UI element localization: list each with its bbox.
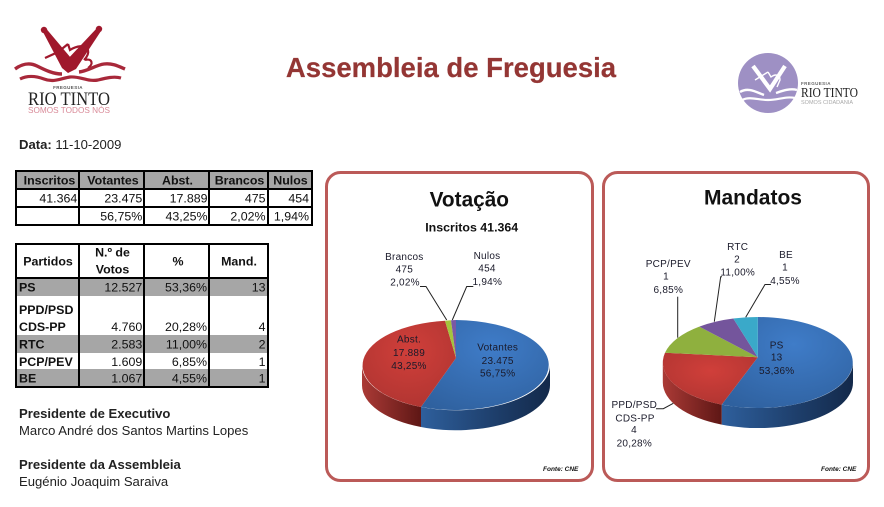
label: RTC: RTC <box>727 242 748 253</box>
table: votes by party: Mand. <box>221 255 257 269</box>
text: assembly president: Eugénio Joaquim Saraiva <box>19 474 169 489</box>
table: votes by party: 1.609 <box>111 355 142 369</box>
panel: Mandatos <box>604 172 868 480</box>
table: turnout: 23.475 <box>104 191 142 205</box>
subheading: registered voters: Inscritos 41.364 <box>425 221 518 235</box>
logo: Freguesia Rio Tinto, red <box>15 26 125 115</box>
label: Brancos: Brancos <box>385 252 424 263</box>
table: votes by party: PCP/PEV <box>19 355 73 369</box>
table: votes by party: Partidos <box>23 255 73 269</box>
leader line: BE <box>746 284 771 317</box>
label: Abst.: Abst. <box>397 335 421 346</box>
logo: Freguesia Rio Tinto, red: FREGUESIA <box>53 85 83 90</box>
label: PCP/PEV: 1 <box>663 272 669 283</box>
table: votes by party: 4,55% <box>172 371 207 385</box>
label: PS: 53,36% <box>759 366 794 377</box>
table: votes by party: 2 <box>259 337 266 351</box>
label: Votantes: Votantes <box>477 343 518 354</box>
election date: Data: 11-10-2009 <box>19 137 121 152</box>
table: turnout: Abst. <box>162 173 193 187</box>
heading: Mandatos: Mandatos <box>704 186 802 209</box>
table: votes by party: Votos <box>96 262 129 276</box>
logo: Freguesia Rio Tinto, red: RIO TINTO <box>28 89 110 110</box>
table: turnout: 2,02% <box>230 210 266 224</box>
label: Brancos: 475 <box>396 264 413 275</box>
table: votes by party: 1.067 <box>111 371 142 385</box>
heading: Votação: Votação <box>430 189 509 212</box>
label: PCP/PEV: PCP/PEV <box>646 259 691 270</box>
label: RTC: 11,00% <box>720 268 755 279</box>
label: PPD/PSD CDS-PP: CDS-PP <box>615 414 655 425</box>
source note: Fonte: CNE <box>821 466 857 473</box>
label: PPD/PSD CDS-PP: 4 <box>631 425 637 436</box>
table: votes by party: 2.583 <box>111 337 142 351</box>
label: PPD/PSD CDS-PP: PPD/PSD <box>611 400 657 411</box>
table: turnout: 1,94% <box>274 210 309 224</box>
label: Abst.: 43,25% <box>391 361 427 372</box>
table: turnout: 17.889 <box>170 191 208 205</box>
table: votes by party: 11,00% <box>166 337 207 351</box>
table: votes by party: PS <box>19 281 36 295</box>
label: PS: 13 <box>771 353 783 364</box>
label: Nulos: 1,94% <box>472 277 502 288</box>
table: votes by party: RTC <box>19 337 45 351</box>
logo: Freguesia Rio Tinto, purple: RIO TINTO <box>801 86 858 101</box>
label: RTC: 2 <box>734 254 740 265</box>
table: votes by party: 1 <box>259 355 266 369</box>
table: votes by party: 6,85% <box>172 355 207 369</box>
table: votes by party: CDS-PP <box>19 320 66 334</box>
label: Nulos: Nulos <box>474 251 500 262</box>
table: votes by party: 1 <box>259 371 266 385</box>
leader line: Brancos <box>420 286 447 320</box>
table: turnout: Nulos <box>273 173 308 187</box>
panel: Votação <box>326 172 592 480</box>
leader line: Nulos <box>452 286 473 320</box>
leader line: PPD/PSD <box>656 403 673 409</box>
label: BE: BE <box>779 250 793 261</box>
text: executive president: Presidente de Executivo <box>19 406 170 421</box>
logo: Freguesia Rio Tinto, purple: FREGUESIA <box>801 81 831 86</box>
table: turnout: Inscritos <box>24 173 75 187</box>
table: turnout: Votantes <box>87 173 139 187</box>
table: turnout: Brancos <box>215 173 264 187</box>
table: votes by party: 4 <box>259 320 266 334</box>
table: votes by party: 4.760 <box>111 320 142 334</box>
table: turnout: 43,25% <box>165 210 208 224</box>
leader line: RTC <box>714 277 722 322</box>
table: turnout: 475 <box>245 191 266 205</box>
text: executive president: Marco André dos Santos Martins Lopes <box>19 423 249 438</box>
table: turnout: 41.364 <box>39 191 77 205</box>
table: votes by party: 53,36% <box>165 281 207 295</box>
leader line: PCP/PEV <box>677 297 679 338</box>
label: PPD/PSD CDS-PP: 20,28% <box>617 439 652 450</box>
table: votes by party: 20,28% <box>165 320 207 334</box>
logo: Freguesia Rio Tinto, purple: SOMOS CIDADANIA <box>801 100 853 106</box>
table: votes by party: N.º de <box>95 246 130 260</box>
label: Nulos: 454 <box>478 264 496 275</box>
table: votes by party: BE <box>19 371 36 385</box>
table: turnout: 56,75% <box>100 210 142 224</box>
table: votes by party: PPD/PSD <box>19 303 73 317</box>
table: votes by party: % <box>172 255 184 269</box>
table: turnout <box>16 171 312 225</box>
label: PS: PS <box>770 340 784 351</box>
table: votes by party: 13 <box>252 281 266 295</box>
label: Brancos: 2,02% <box>390 278 420 289</box>
text: executive president <box>19 406 249 438</box>
logo: Freguesia Rio Tinto, purple <box>738 53 858 113</box>
table: votes by party: 12.527 <box>104 281 142 295</box>
source note: Fonte: CNE <box>543 466 579 473</box>
label: PCP/PEV: 6,85% <box>653 285 683 296</box>
table: votes by party <box>16 244 268 387</box>
logo: Freguesia Rio Tinto, red: SOMOS TODOS NÓS <box>28 106 110 115</box>
label: Abst.: 17.889 <box>393 348 425 359</box>
pie chart: seats <box>611 242 853 450</box>
label: BE: 4,55% <box>770 276 800 287</box>
label: Votantes: 56,75% <box>480 369 515 380</box>
pie chart: votes <box>362 251 550 430</box>
label: Votantes: 23.475 <box>482 356 514 367</box>
table: turnout: 454 <box>288 191 309 205</box>
text: assembly president <box>19 457 182 489</box>
label: BE: 1 <box>782 263 788 274</box>
title: Assembleia de Freguesia <box>286 52 617 83</box>
text: assembly president: Presidente da Assembleia <box>19 457 182 472</box>
